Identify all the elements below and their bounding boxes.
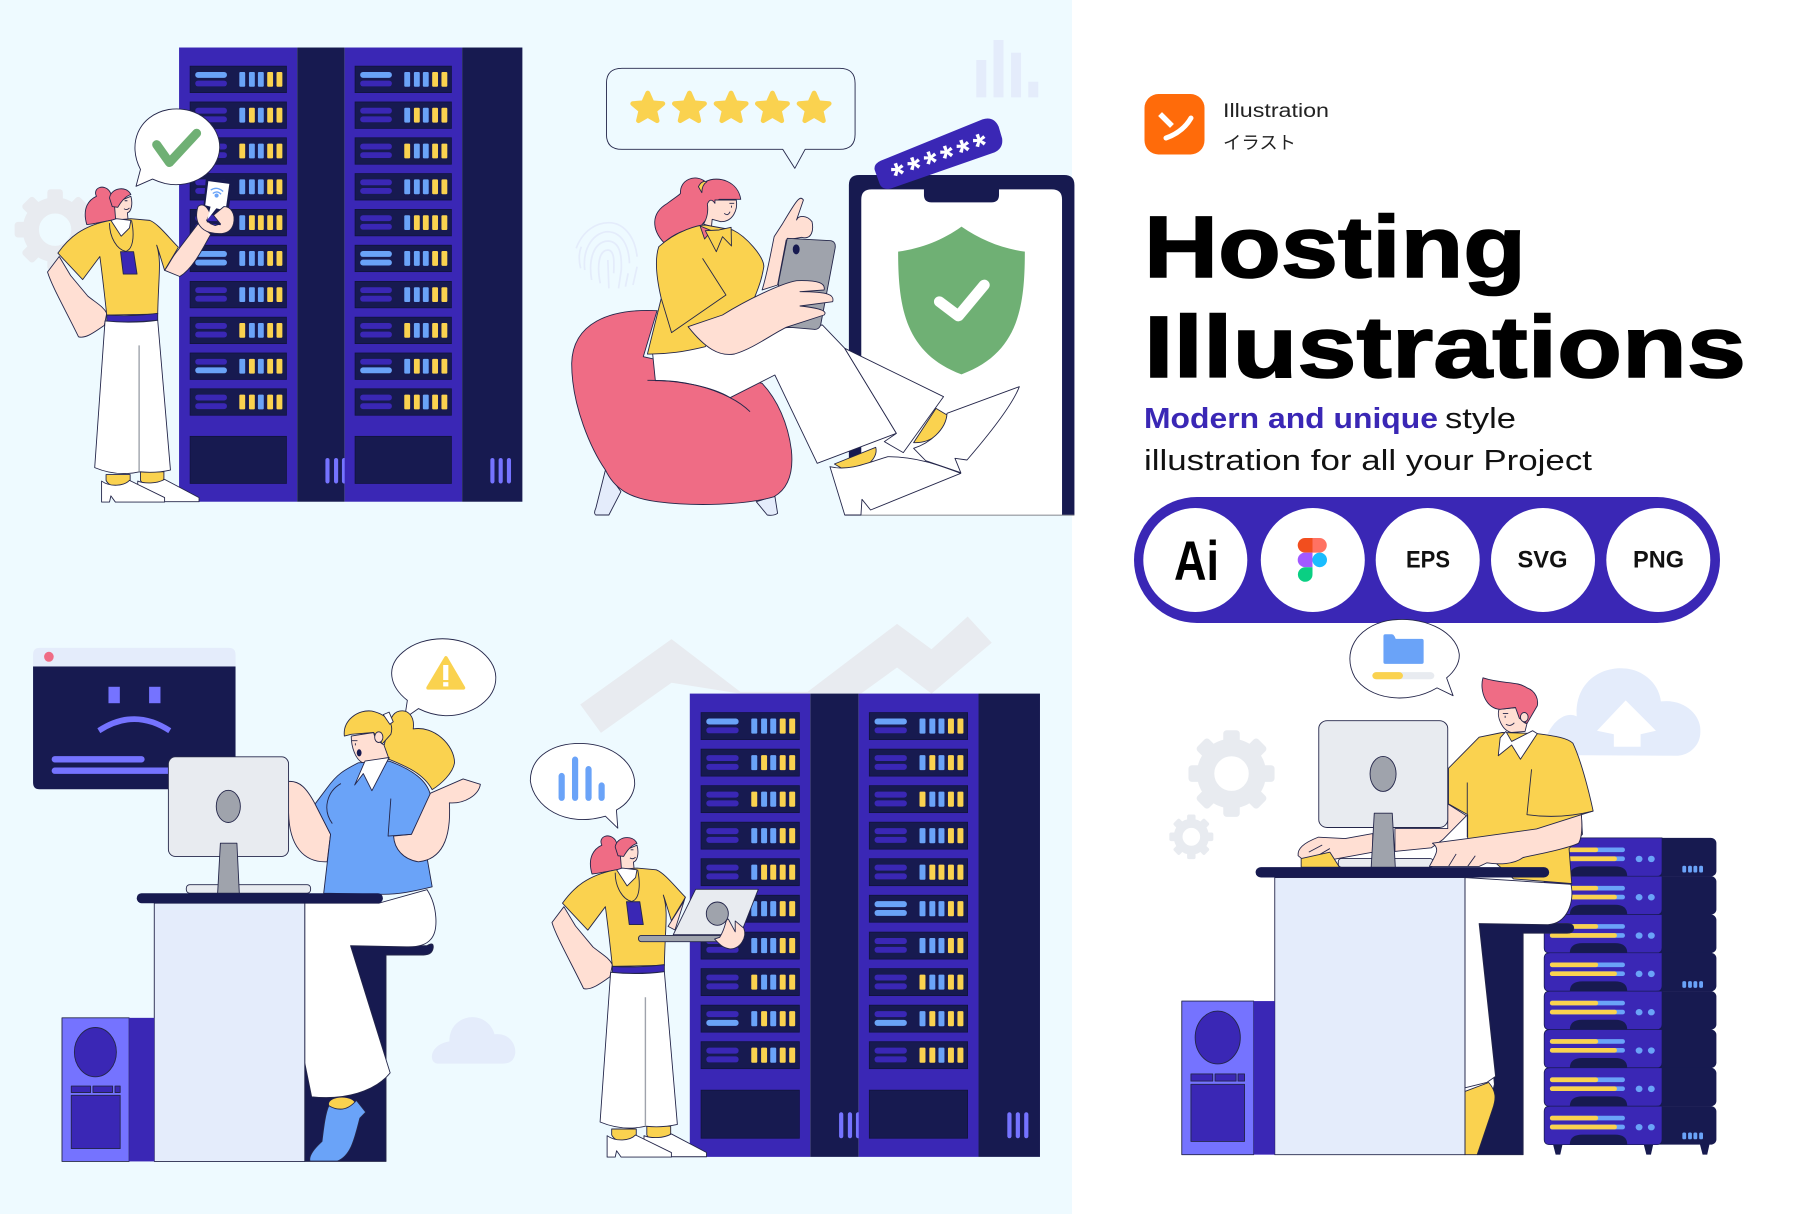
right panel: header — [1134, 94, 1746, 623]
error window with sad face — [33, 648, 236, 789]
phone with security screen — [845, 175, 1074, 516]
badge: Ai — [1143, 508, 1247, 612]
title — [1144, 199, 1746, 396]
file format pill — [1134, 497, 1720, 623]
brand text: Illustration — [1223, 101, 1329, 122]
panel: server rack with woman and phone — [15, 48, 522, 502]
badge: Ai: Ai — [1174, 529, 1219, 592]
arm holding phone — [165, 177, 234, 277]
speech bubble: warning — [392, 639, 496, 718]
desk — [137, 893, 383, 1161]
speech bubble: bars — [530, 743, 635, 828]
subtitle: Modern and unique — [1144, 403, 1438, 435]
desktop monitor — [1319, 721, 1448, 867]
icon: green shield with check — [898, 227, 1025, 374]
icon: background gear — [15, 189, 96, 270]
woman with blue shirt — [289, 711, 480, 894]
badge: EPS — [1376, 508, 1480, 612]
white trousers and blue shoe — [305, 890, 436, 1161]
icon: gears — [1169, 730, 1275, 859]
badge: PNG: PNG — [1633, 546, 1684, 574]
man seated — [1298, 678, 1593, 1155]
badge: SVG: SVG — [1518, 546, 1568, 574]
panel: security, woman on chair with tablet — [572, 40, 1074, 516]
badge: Figma — [1261, 508, 1365, 612]
badge: SVG — [1491, 508, 1595, 612]
icon: background cloud — [432, 1017, 515, 1064]
subtitle: style — [1445, 403, 1516, 435]
woman standing with lanyard — [552, 836, 707, 1157]
logo — [1144, 94, 1204, 154]
computer tower — [1182, 1001, 1275, 1155]
desktop monitor — [168, 757, 311, 893]
stool — [305, 944, 433, 1161]
brand text: イラスト — [1223, 133, 1296, 153]
icon: cloud upload — [1542, 668, 1700, 756]
speech bubble: five stars — [606, 68, 855, 168]
server rack — [690, 694, 1040, 1157]
password pill background — [874, 119, 1002, 189]
speech bubble: green check — [135, 109, 220, 186]
icon: background fingerprint — [576, 223, 637, 288]
subtitle — [1144, 403, 1592, 477]
panel: man at desk with server stack — [1169, 619, 1716, 1155]
woman seated with tablet — [647, 178, 1019, 515]
badge: EPS: EPS — [1406, 546, 1450, 574]
server rack — [179, 48, 522, 502]
speech bubble: folder progress — [1350, 619, 1459, 698]
subtitle: illustration for all your Project — [1144, 445, 1592, 477]
password pill asterisks: ****** — [887, 126, 995, 195]
panel: sad server, woman at desk — [33, 639, 515, 1161]
panel: rack with woman and laptop — [530, 617, 1040, 1157]
left panel background — [0, 0, 1072, 1214]
woman standing with lanyard — [48, 187, 199, 502]
title: Illustrations — [1144, 299, 1746, 396]
brand text — [1223, 101, 1329, 153]
server stack — [1544, 838, 1716, 1155]
chair — [572, 310, 792, 515]
computer tower — [62, 1018, 154, 1161]
badge: PNG — [1606, 508, 1710, 612]
laptop held by woman — [638, 889, 758, 949]
background trend arrow — [580, 617, 992, 733]
icon: background bar chart — [976, 40, 1038, 97]
title: Hosting — [1144, 199, 1526, 296]
desk — [1256, 867, 1549, 1155]
